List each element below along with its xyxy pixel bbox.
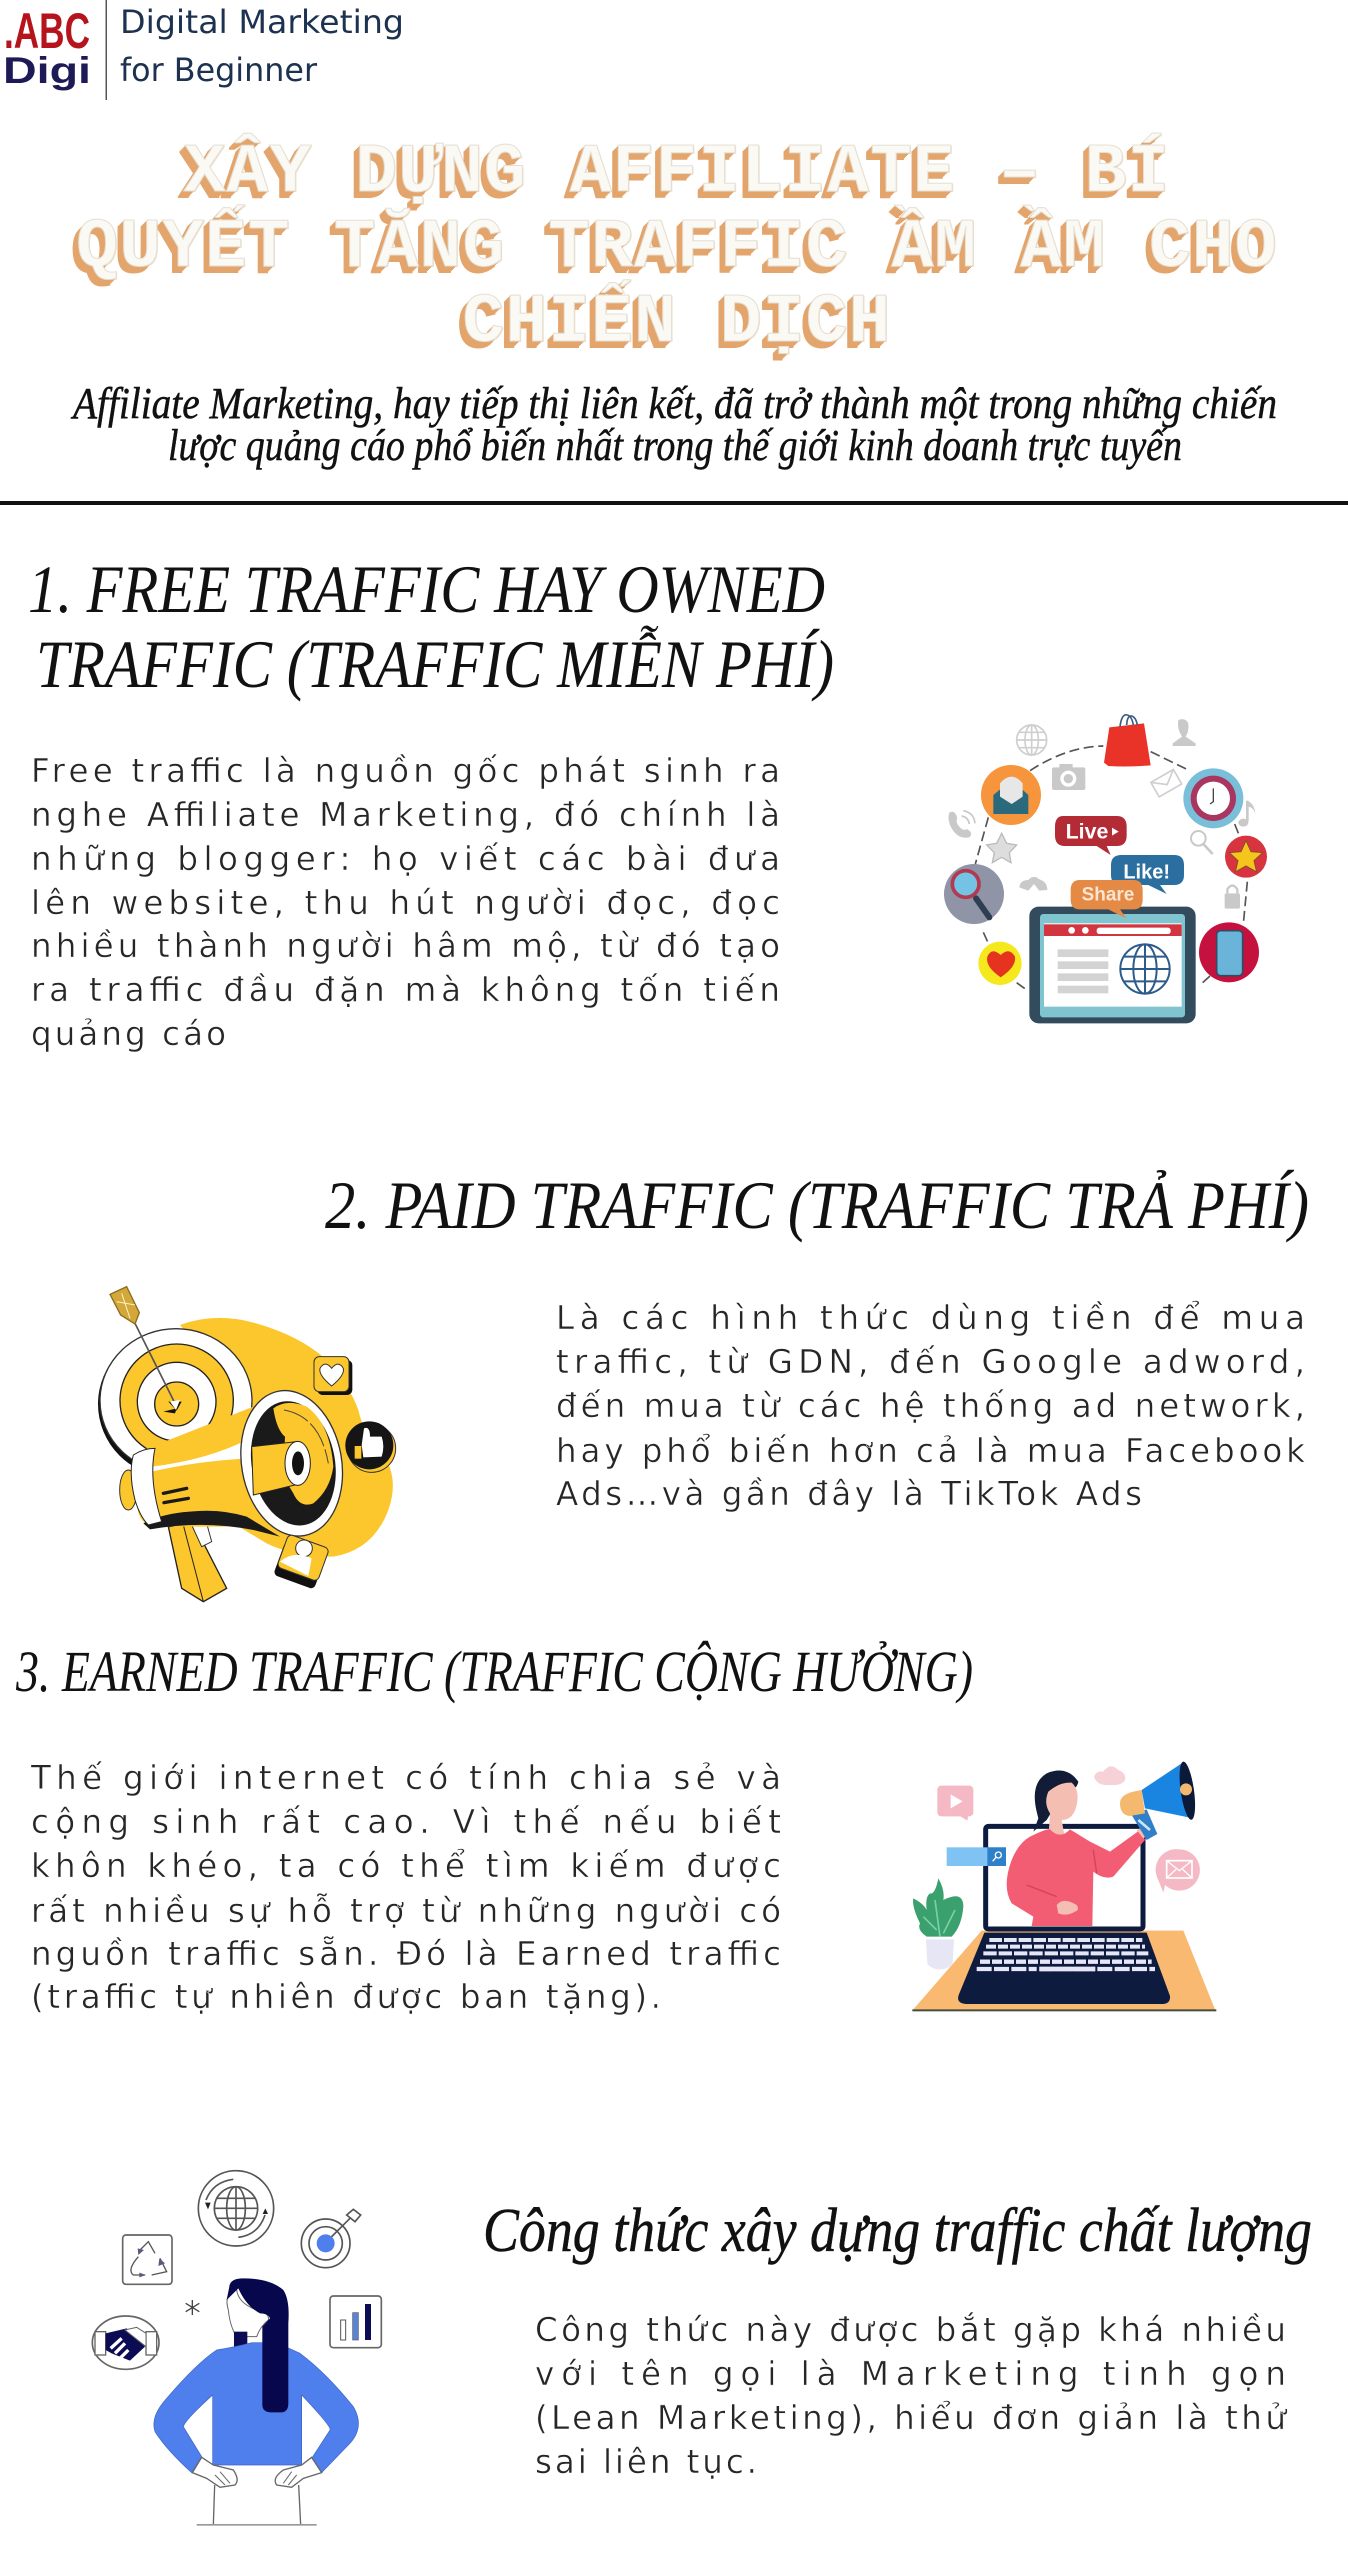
heading: free traffic: TRAFFIC (TRAFFIC MIỄN PHÍ) xyxy=(36,626,834,702)
subtitle: lược quảng cáo phổ biến nhất trong thế giới kinh doanh trực tuyến xyxy=(168,421,1182,470)
text block: free traffic: lên website, thu hút người đọc, đọc xyxy=(31,884,780,922)
text block: paid traffic: traffic, từ GDN, đến Google adword, xyxy=(556,1343,1305,1381)
icon: social media tablet illustration: Live xyxy=(1066,819,1108,843)
text block: free traffic xyxy=(31,752,780,1053)
text block: earned traffic: khôn khéo, ta có thể tìm kiếm được xyxy=(31,1847,781,1885)
text block: free traffic: những blogger: họ viết các bài đưa xyxy=(31,840,780,878)
text block: free traffic: nghe Affiliate Marketing, đó chính là xyxy=(31,796,780,834)
logo: Digital Marketing xyxy=(120,3,404,41)
heading: earned traffic: 3. EARNED TRAFFIC (TRAFFIC CỘNG HƯỞNG) xyxy=(15,1639,973,1704)
title: XÂY DỰNG AFFILIATE – BÍ xyxy=(184,134,1170,213)
icon: woman with marketing icons illustration xyxy=(92,2171,381,2526)
logo: .ABC xyxy=(4,3,90,59)
text block: paid traffic: Là các hình thức dùng tiền để mua xyxy=(556,1299,1305,1337)
icon: social media tablet illustration: Like! xyxy=(1123,861,1170,883)
text block: free traffic: nhiều thành người hâm mộ, từ đó tạo xyxy=(31,927,780,965)
text block: earned traffic: (traffic tự nhiên được ban tặng). xyxy=(31,1978,661,2016)
logo: Digi xyxy=(3,50,91,91)
icon: laptop woman illustration xyxy=(912,1761,1216,2011)
text block: formula: Công thức này được bắt gặp khá nhiều xyxy=(535,2311,1286,2349)
text block: paid traffic xyxy=(556,1299,1305,1513)
text block: paid traffic: hay phổ biến hơn cả là mua Facebook xyxy=(556,1432,1305,1470)
icon: megaphone and target illustration xyxy=(98,1287,396,1602)
text block: formula: sai liên tục. xyxy=(535,2443,757,2481)
icon: social media tablet illustration xyxy=(944,715,1267,1023)
text block: earned traffic xyxy=(30,1759,781,2016)
text block: formula xyxy=(535,2311,1287,2481)
subtitle xyxy=(70,379,1277,470)
divider xyxy=(0,501,1348,505)
icon: social media tablet illustration: Share xyxy=(1082,885,1135,906)
text block: earned traffic: Thế giới internet có tính chia sẻ và xyxy=(30,1759,781,1797)
text block: free traffic: Free traffic là nguồn gốc phát sinh ra xyxy=(31,752,780,790)
text block: free traffic: quảng cáo xyxy=(31,1015,226,1053)
text block: formula: (Lean Marketing), hiểu đơn giản là thử xyxy=(535,2399,1287,2437)
title: CHIẾN DỊCH xyxy=(462,284,892,363)
text block: earned traffic: nguồn traffic sẵn. Đó là Earned traffic xyxy=(31,1935,781,1973)
text block: paid traffic: Ads…và gần đây là TikTok Ads xyxy=(556,1475,1142,1513)
text block: earned traffic: rất nhiều sự hỗ trợ từ những người có xyxy=(31,1892,781,1930)
text block: free traffic: ra traffic đầu đặn mà không tốn tiến xyxy=(31,971,780,1009)
title: QUYẾT TĂNG TRAFFIC ẦM ẦM CHO xyxy=(76,209,1278,288)
heading: free traffic: 1. FREE TRAFFIC HAY OWNED xyxy=(28,551,825,627)
logo: for Beginner xyxy=(120,51,318,89)
text block: paid traffic: đến mua từ các hệ thống ad network, xyxy=(556,1387,1305,1425)
text block: formula: với tên gọi là Marketing tinh gọn xyxy=(535,2355,1286,2393)
logo xyxy=(3,0,404,100)
text block: earned traffic: cộng sinh rất cao. Vì thế nếu biết xyxy=(31,1803,781,1841)
title xyxy=(72,132,1278,363)
heading: free traffic xyxy=(28,551,834,702)
